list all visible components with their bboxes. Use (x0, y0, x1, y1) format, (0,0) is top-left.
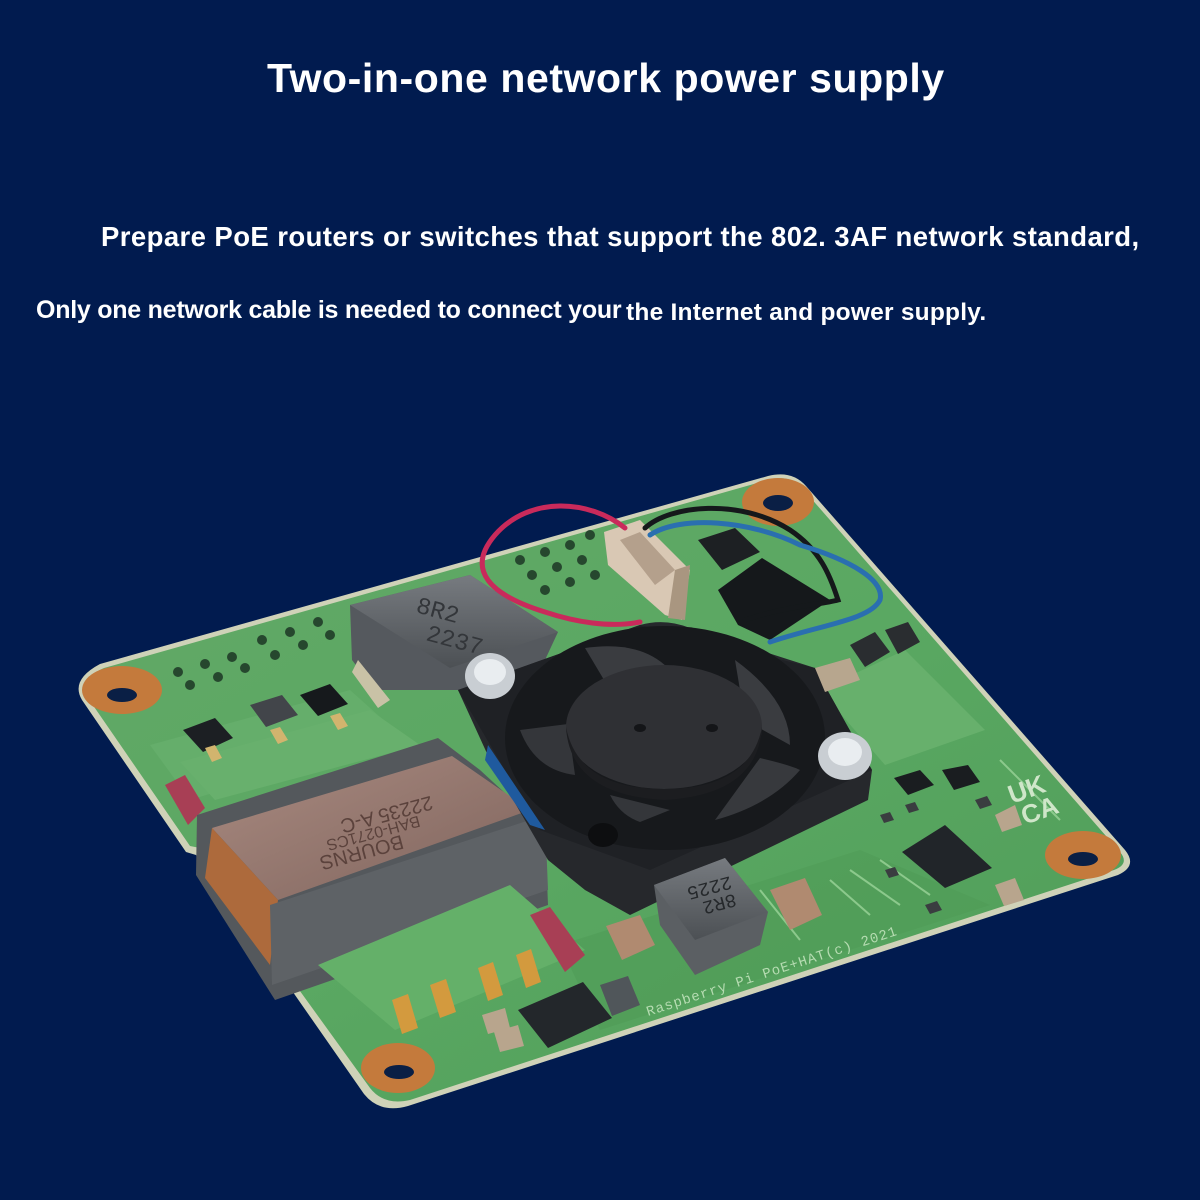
right side chips (850, 622, 1063, 914)
text line: PoE requirement: Prepare PoE routers or switches that support the 802. 3AF network standard, (101, 221, 1140, 252)
connector (604, 520, 690, 620)
wires (482, 506, 880, 642)
transformer: 22235 A-C (338, 791, 435, 837)
mounting holes (82, 478, 1121, 1093)
transformer (196, 738, 548, 1000)
text line: one cable, first part: Only one network cable is needed to connect your (36, 296, 621, 324)
small chips left (165, 660, 420, 825)
lower green module and pads (318, 885, 900, 1052)
inductor top: 8R2 (413, 594, 462, 631)
lower green module and pads: Raspberry Pi PoE+HAT(c) 2021 (645, 924, 900, 1021)
text line: one cable, second part: the Internet and power supply. (626, 299, 986, 326)
inductor top: 2237 (423, 622, 486, 663)
top connector chips (698, 528, 830, 640)
inductor top (350, 575, 558, 690)
capacitors (606, 658, 860, 960)
transformer: BOURNS (317, 830, 406, 873)
board (79, 474, 1130, 1108)
right side chips: CA (1017, 790, 1063, 831)
vias (173, 530, 600, 690)
trace areas (150, 690, 400, 800)
front inductor: 2225 (684, 870, 734, 903)
transformer: BAH-0271CS (325, 812, 422, 853)
right side chips: UK (1004, 769, 1050, 810)
front inductor (654, 858, 768, 975)
title: Two-in-one network power supply (267, 55, 945, 101)
front inductor: 8R2 (700, 888, 739, 918)
fan (458, 622, 872, 915)
